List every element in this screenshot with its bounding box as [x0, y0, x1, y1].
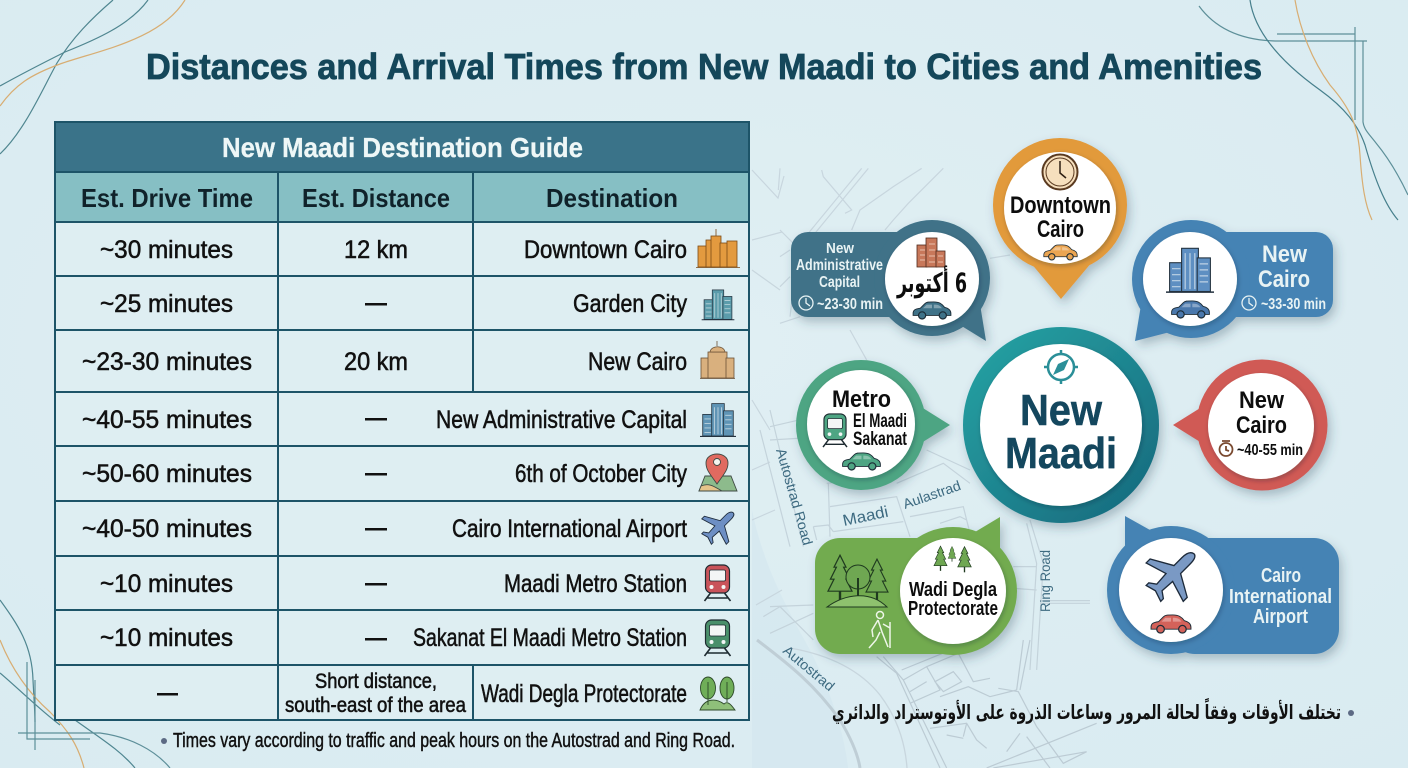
row: Downtown Cairo — [100, 229, 740, 268]
table column headers: Est. Drive Time — [81, 183, 253, 213]
row: Garden City: ~25 minutes — [100, 290, 233, 318]
row: Sakanat El Maadi Metro Station — [100, 620, 730, 656]
icon: airplane — [1146, 553, 1195, 601]
icon: map pin — [699, 454, 737, 491]
row: New Administrative Capital — [82, 404, 736, 436]
callout: New Administrative Capital: New — [826, 240, 854, 257]
icon: car — [1044, 245, 1077, 260]
icon: clock — [1042, 154, 1078, 190]
row: New Cairo — [82, 341, 735, 378]
callout: New Cairo (red) — [1173, 360, 1328, 490]
row: Maadi Metro Station: ~10 minutes — [100, 570, 233, 598]
callout: Cairo International Airport: Cairo — [1261, 565, 1301, 587]
callout: New Cairo (blue): ~33-30 min — [1261, 296, 1326, 313]
row: Downtown Cairo: 12 km — [344, 236, 408, 264]
table column headers — [55, 172, 749, 222]
callout: Wadi Degla Protectorate: Protectorate — [908, 598, 998, 620]
icon: trees and hill — [700, 677, 735, 710]
row: Cairo International Airport — [82, 512, 734, 544]
center hub: New Maadi: Maadi — [1005, 429, 1117, 478]
icon: garden city towers — [702, 290, 734, 320]
row: New Cairo: ~23-30 minutes — [82, 348, 252, 376]
table title band: New Maadi Destination Guide — [222, 132, 583, 163]
footnote: Times vary according to traffic and peak hours on the Autostrad and Ring Road. — [173, 730, 735, 752]
icon: car — [1172, 301, 1209, 318]
icon: glass tower — [1166, 248, 1214, 292]
row: New Administrative Capital: New Administrative Capital — [436, 406, 687, 434]
row: Wadi Degla Protectorate — [157, 670, 735, 717]
row: New Administrative Capital: ~40-55 minutes — [82, 406, 252, 434]
row: 6th of October City: 6th of October City — [515, 460, 687, 488]
row: Wadi Degla Protectorate: Short distance, — [315, 670, 437, 693]
icon: red train — [704, 565, 730, 601]
callout: New Cairo (red): ~40-55 min — [1237, 442, 1303, 459]
icon: capital tower — [700, 404, 736, 436]
callout: Wadi Degla Protectorate — [815, 517, 1017, 655]
icon: car — [843, 453, 880, 470]
row: Downtown Cairo: ~30 minutes — [100, 236, 233, 264]
callout: Downtown Cairo: Cairo — [1037, 216, 1084, 243]
callout: New Cairo (red): Cairo — [1236, 412, 1287, 439]
callout: Metro: Sakanat — [853, 429, 907, 450]
table title band — [55, 122, 749, 172]
icon: hiker — [869, 612, 890, 648]
row: Maadi Metro Station — [100, 565, 730, 601]
row: Downtown Cairo: Downtown Cairo — [524, 236, 687, 264]
callout: New Administrative Capital: 6 أكتوبر — [896, 265, 967, 299]
callout: Downtown Cairo — [993, 138, 1127, 299]
row: Sakanat El Maadi Metro Station: Sakanat El Maadi Metro Station — [413, 624, 687, 652]
map label: Aulastrad: Aulastrad — [901, 477, 963, 512]
callout: Cairo International Airport — [1107, 516, 1339, 654]
icon: new cairo building — [700, 341, 735, 378]
icon: airplane — [702, 512, 734, 544]
callout: Cairo International Airport: International — [1229, 586, 1332, 608]
icon: clock — [799, 296, 813, 310]
callout: New Administrative Capital — [791, 220, 990, 341]
map label: Autostrad Road: Autostrad Road — [773, 446, 816, 547]
row: Garden City — [100, 290, 734, 320]
icon: car — [1151, 615, 1191, 633]
icon: clock — [1242, 296, 1256, 310]
icon: stopwatch — [1220, 441, 1232, 456]
row: 6th of October City: ~50-60 minutes — [82, 460, 252, 488]
callout: Metro — [796, 360, 950, 490]
icon: office building — [917, 238, 945, 267]
table column headers: Est. Distance — [302, 183, 450, 213]
icon: train — [823, 414, 847, 447]
icon: compass — [1044, 350, 1078, 384]
callout: Cairo International Airport: Airport — [1253, 606, 1308, 628]
callout: Downtown Cairo: Downtown — [1010, 192, 1111, 219]
row: 6th of October City — [82, 454, 737, 491]
background street map — [752, 168, 1097, 768]
callout: New Administrative Capital: ~23-30 min — [817, 296, 883, 313]
panel: destination table — [55, 122, 749, 720]
icon: small trees — [934, 546, 971, 572]
icon: car — [913, 302, 951, 319]
row: Cairo International Airport: ~40-50 minutes — [82, 515, 252, 543]
map label: Autostrad: Autostrad — [780, 642, 838, 694]
center hub: New Maadi — [963, 327, 1159, 523]
map label: Ring Road: Ring Road — [1037, 550, 1053, 612]
icon: downtown skyline — [696, 229, 740, 268]
icon: forest — [827, 555, 888, 607]
callout: Metro: El Maadi — [853, 411, 907, 432]
callout: New Administrative Capital: Capital — [819, 274, 860, 291]
callout: New Cairo (blue): Cairo — [1258, 266, 1310, 293]
row: New Cairo: New Cairo — [588, 348, 687, 376]
callout: New Cairo (blue): New — [1262, 241, 1307, 268]
center hub: New Maadi: New — [1020, 386, 1103, 435]
row: Sakanat El Maadi Metro Station: ~10 minutes — [100, 624, 233, 652]
row: New Cairo: 20 km — [344, 348, 408, 376]
row: Cairo International Airport: Cairo International Airport — [452, 515, 687, 543]
callout: New Cairo (red): New — [1239, 387, 1284, 414]
callout: New Administrative Capital: Administrative — [796, 257, 883, 274]
row: Maadi Metro Station: Maadi Metro Station — [504, 570, 687, 598]
row: Garden City: Garden City — [573, 290, 687, 318]
callout: Wadi Degla Protectorate: Wadi Degla — [909, 579, 998, 601]
table column headers: Destination — [546, 183, 678, 213]
icon: green train — [704, 620, 730, 656]
row: Wadi Degla Protectorate: Wadi Degla Protectorate — [481, 680, 687, 708]
row: Wadi Degla Protectorate: south-east of the area — [285, 694, 466, 717]
title: Distances and Arrival Times from New Maadi to Cities and Amenities — [146, 46, 1262, 87]
callout: New Cairo (blue) — [1132, 220, 1333, 341]
map label: Maadi: Maadi — [841, 504, 890, 530]
callout: Metro: Metro — [832, 386, 891, 413]
